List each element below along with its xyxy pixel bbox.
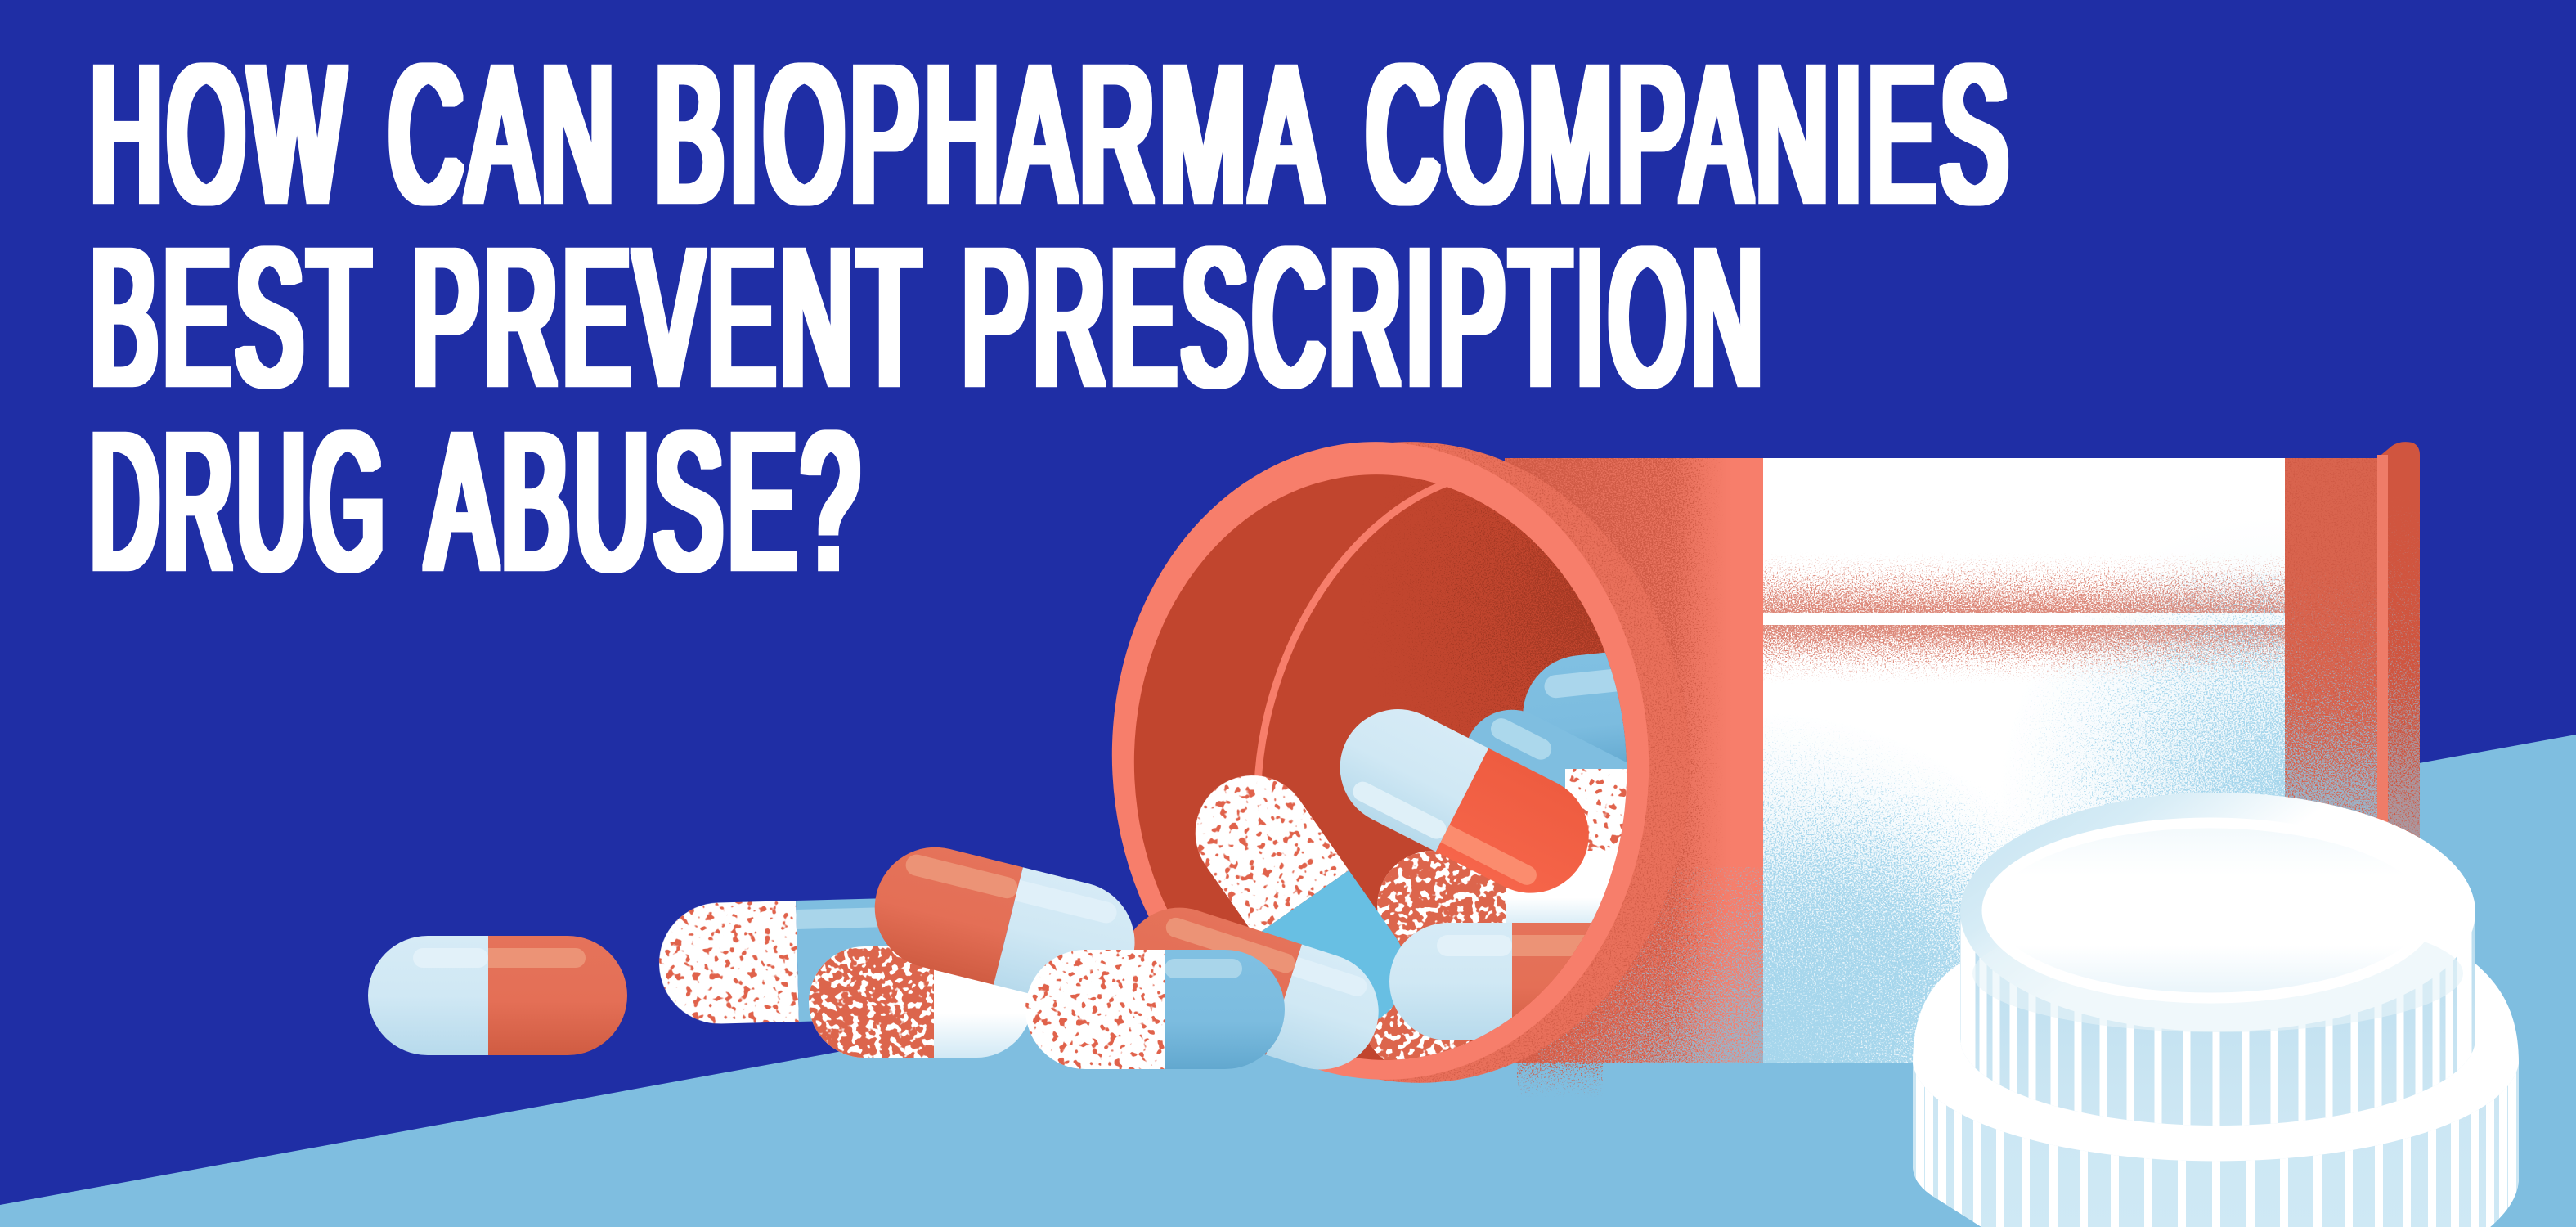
bottle base panel [2285,458,2420,851]
bottle base rim [2377,442,2420,851]
cap lower ring [1913,953,2519,1227]
cap top disc [1960,793,2475,1031]
capsule: dense speckled bottom [1369,1005,1470,1060]
floor [0,735,2576,1227]
interior shadow [1381,479,1627,757]
label salmon band [1763,552,2285,684]
cap upper ridges [1960,900,2475,1145]
capsule: orange and light [862,834,1147,1016]
capsule: white section [1505,851,1627,929]
bottle cap [1913,793,2519,1227]
title: PREVENT [412,209,926,426]
capsule: dense speckled middle [1377,851,1506,946]
capsule: speckled and blue front [1025,950,1285,1069]
bottle neck thickness [1124,428,1706,1097]
body grain shadow [1505,458,1763,1063]
floor shadow spray [1517,1062,1603,1098]
title: CAN [389,26,620,243]
bottle body left [1505,458,1763,1063]
bottle interior [1120,462,1641,1072]
title: BEST [91,209,375,426]
capsule: light and orange lower [1389,923,1591,1040]
pills inside bottle [1173,646,1676,1072]
capsule: blue top right [1523,653,1627,771]
capsule: light and red [1340,709,1589,893]
bottle [1096,428,2420,1097]
cap inner disc [1987,823,2432,998]
interior thread line [1258,483,1447,785]
title: HOW [91,26,349,243]
title [91,26,2013,610]
capsule: light and orange single [368,936,627,1055]
capsule: orange and light behind [1106,892,1393,1085]
cap lower ridges [1913,1063,2519,1227]
capsule: small blue behind [1459,710,1627,806]
capsule: speckled and blue [1196,775,1402,1019]
title: DRUG [91,393,389,610]
label [1763,458,2285,1063]
capsule: speckled and blue far left [657,897,922,1025]
title: PRESCRIPTION [963,209,1768,426]
body lower blue-grey spray [1537,867,1763,1063]
capsule: speckled right [1565,769,1631,871]
title: ABUSE? [428,393,864,610]
label blue spray [1763,573,2285,1063]
capsule: dense speckled and white [809,946,1032,1058]
title: BIOPHARMA [655,26,1326,243]
bottle mouth ring [1096,428,1665,1094]
